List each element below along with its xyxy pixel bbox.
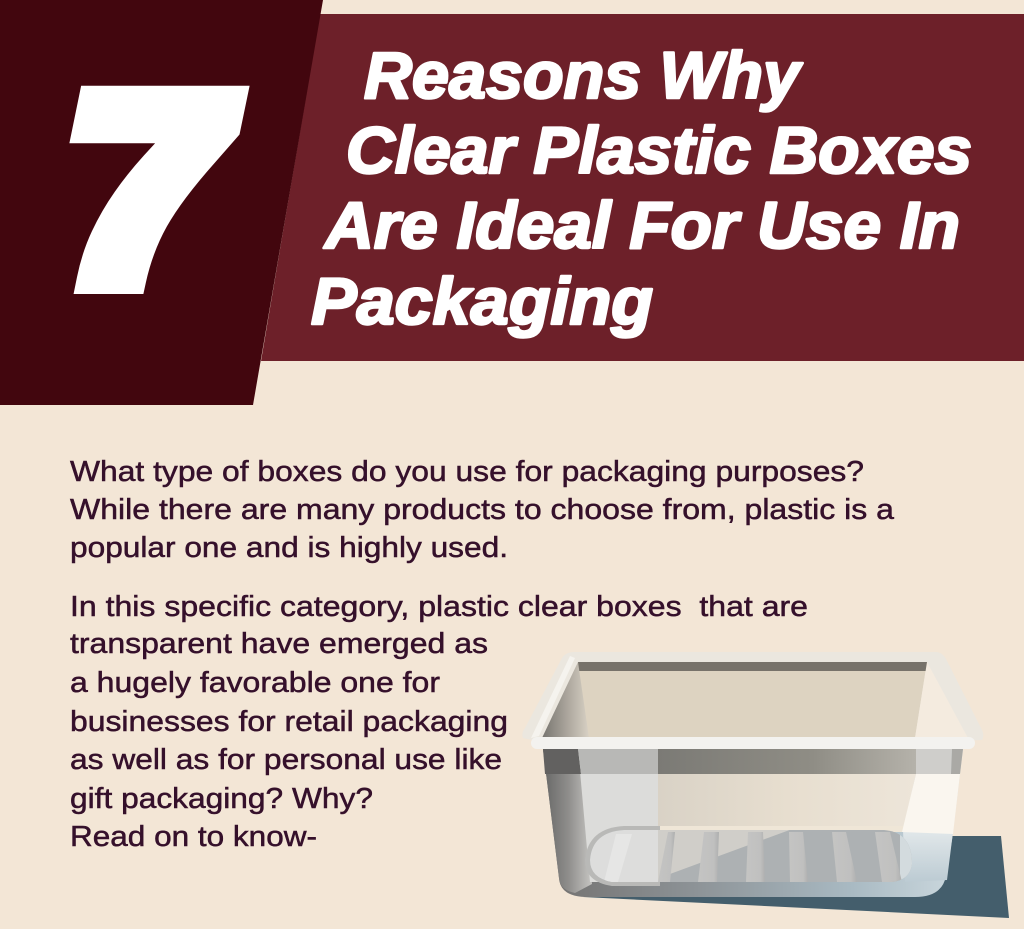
icon: clear plastic box [522, 652, 1009, 918]
second paragraph: businesses for retail packaging [70, 706, 508, 738]
box back wall lower [658, 774, 916, 830]
panel: title band [261, 14, 1024, 361]
box shadow [583, 836, 1009, 918]
title: Packaging [311, 264, 653, 338]
intro paragraph [70, 456, 894, 564]
left inner wall [542, 662, 589, 738]
box rim back [522, 652, 983, 742]
big number 7: 7 [68, 43, 236, 336]
title: Reasons Why [364, 38, 803, 112]
second paragraph: as well as for personal use like [70, 744, 502, 776]
left wall [543, 749, 592, 893]
tray ribs [604, 832, 902, 882]
top band right [916, 749, 952, 774]
tray light wedge [658, 830, 789, 882]
right inner wall [915, 662, 968, 738]
panel: number block [0, 0, 323, 405]
title: Clear Plastic Boxes [346, 113, 972, 187]
tray halo [585, 826, 660, 886]
box back wall [578, 662, 927, 738]
title: Are Ideal For Use In [323, 188, 960, 262]
top band centre [658, 749, 916, 774]
intro paragraph: While there are many products to choose from, plastic is a [70, 494, 894, 526]
second paragraph: a hugely favorable one for [70, 667, 441, 699]
second paragraph: transparent have emerged as [70, 628, 488, 660]
front rim [531, 737, 975, 749]
second paragraph: In this specific category, plastic clear boxes that are [70, 591, 808, 623]
intro paragraph: popular one and is highly used. [70, 532, 508, 564]
intro paragraph: What type of boxes do you use for packaging purposes? [70, 456, 864, 488]
second paragraph [70, 591, 808, 853]
second paragraph: gift packaging? Why? [70, 783, 373, 815]
top band left [543, 749, 581, 774]
right pale panel [902, 774, 960, 834]
right lower translucent [903, 830, 953, 882]
dark back strip [578, 662, 927, 671]
title [311, 38, 972, 338]
box outer silhouette [543, 749, 963, 897]
second paragraph: Read on to know- [70, 821, 317, 853]
left rim highlight [531, 656, 575, 738]
light left panel [578, 749, 658, 882]
floor tray [590, 830, 912, 882]
